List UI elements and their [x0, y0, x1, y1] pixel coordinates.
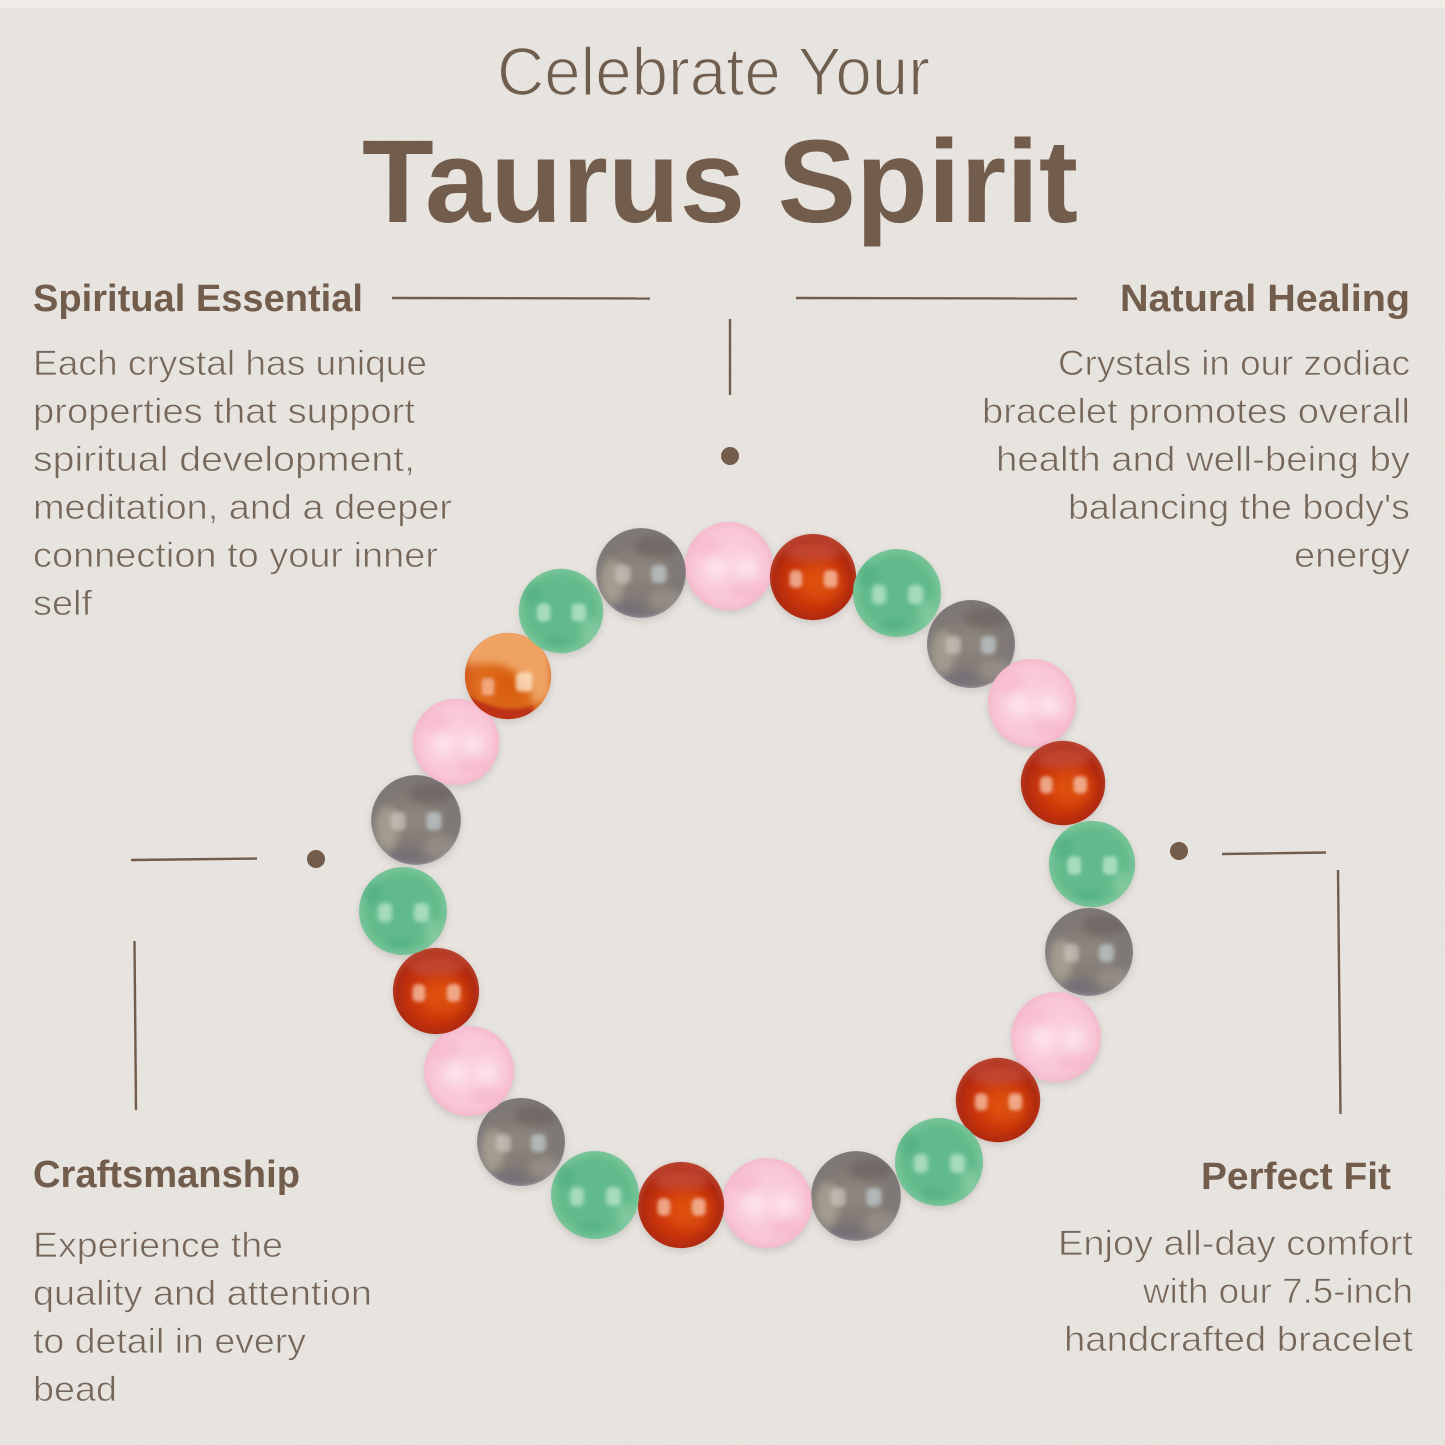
text block: Perfect Fit description — [1058, 1224, 1413, 1359]
bead: labradorite — [596, 528, 686, 618]
text block: Spiritual Essential description: self — [33, 584, 92, 623]
connector: top callout lines and dot — [392, 298, 1077, 465]
text block: Natural Healing description: balancing the body's — [1068, 488, 1410, 527]
panel: Perfect Fit — [1058, 1156, 1413, 1359]
title: Taurus Spirit: Taurus Spirit — [362, 116, 1078, 248]
bead shadows — [359, 525, 1135, 1251]
text block: Spiritual Essential description: connection to your inner — [33, 536, 438, 575]
text block: Perfect Fit description: Enjoy all-day comfort — [1058, 1224, 1413, 1263]
text block: Natural Healing description: Crystals in our zodiac — [1058, 344, 1410, 383]
panel: Natural Healing — [982, 278, 1411, 575]
bead: labradorite — [927, 600, 1015, 688]
bead: aventurine — [519, 569, 603, 653]
panel: Craftsmanship — [33, 1154, 372, 1409]
title: Celebrate Your: Celebrate Your — [497, 34, 930, 110]
text block: Natural Healing description: health and well-being by — [996, 440, 1411, 479]
text block: Spiritual Essential description: spiritual development, — [33, 440, 415, 479]
bead: aventurine — [1049, 821, 1135, 907]
heading: Spiritual Essential: Spiritual Essential — [33, 278, 363, 320]
bead: carnelian — [1021, 741, 1105, 825]
connector: left callout lines and dot — [131, 850, 325, 1110]
text block: Craftsmanship description — [33, 1226, 372, 1409]
bead: aventurine — [551, 1151, 639, 1239]
text block: Spiritual Essential description: Each crystal has unique — [33, 344, 427, 383]
bead: carnelian — [770, 534, 856, 620]
text block: Spiritual Essential description — [33, 344, 452, 623]
text block: Spiritual Essential description: properties that support — [33, 392, 415, 431]
bead: labradorite — [477, 1098, 565, 1186]
text block: Craftsmanship description: Experience the — [33, 1226, 283, 1265]
bracelet — [359, 522, 1135, 1251]
bead: rose quartz — [685, 522, 773, 610]
bead: labradorite — [1045, 908, 1133, 996]
bead: carnelian — [956, 1058, 1040, 1142]
bead: rose quartz — [722, 1158, 812, 1248]
heading: Natural Healing: Natural Healing — [1120, 278, 1410, 320]
text block: Natural Healing description: energy — [1294, 536, 1411, 575]
text block: Natural Healing description: bracelet promotes overall — [982, 392, 1410, 431]
bead: carnelian — [393, 948, 479, 1034]
bead: aventurine — [895, 1118, 983, 1206]
text block: Natural Healing description — [982, 344, 1411, 575]
text block: Perfect Fit description: handcrafted bracelet — [1064, 1320, 1413, 1359]
text block: Craftsmanship description: to detail in every — [33, 1322, 307, 1361]
text block: Perfect Fit description: with our 7.5-inch — [1142, 1272, 1413, 1311]
text block: Craftsmanship description: quality and attention — [33, 1274, 372, 1313]
panel: Spiritual Essential — [33, 278, 452, 623]
connector: right callout lines and dot — [1170, 842, 1340, 1114]
bead: aventurine — [853, 549, 941, 637]
bead: labradorite — [371, 775, 461, 865]
text block: Spiritual Essential description: meditation, and a deeper — [33, 488, 452, 527]
bead: rose quartz — [1011, 992, 1101, 1082]
heading: Perfect Fit: Perfect Fit — [1201, 1156, 1391, 1198]
bead: orange carnelian — [465, 617, 551, 725]
bead: labradorite — [811, 1151, 901, 1241]
heading: Craftsmanship: Craftsmanship — [33, 1154, 300, 1196]
text block: Craftsmanship description: bead — [33, 1370, 117, 1409]
bead: rose quartz — [413, 699, 499, 785]
bead: rose quartz — [424, 1026, 514, 1116]
bead: carnelian — [638, 1162, 724, 1248]
bead: aventurine — [359, 867, 447, 955]
bead: rose quartz — [988, 659, 1076, 747]
